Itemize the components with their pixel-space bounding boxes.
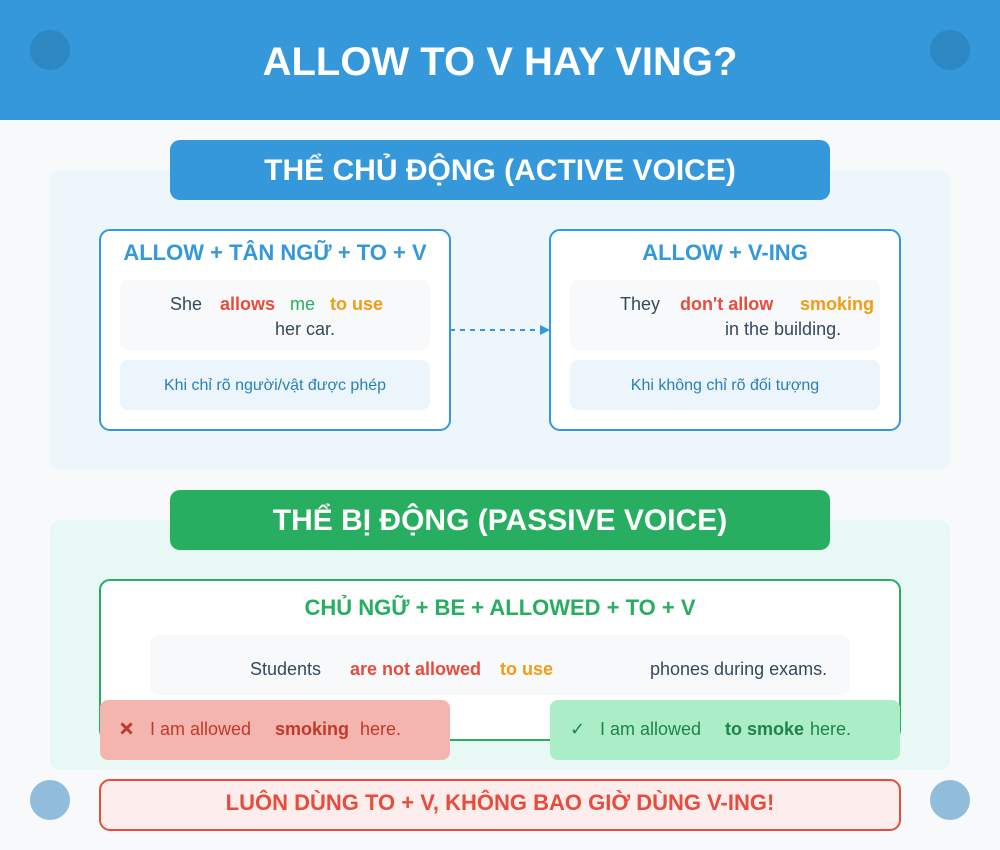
callout: incorrect example: here. xyxy=(360,719,401,739)
callout: correct example: to smoke xyxy=(725,719,804,739)
example sentence: Students are not allowed to use xyxy=(150,635,850,695)
callout: correct example: here. xyxy=(810,719,851,739)
example sentence: Students are not allowed to use: are not allowed xyxy=(350,659,481,679)
title: ALLOW TO V HAY VING? xyxy=(263,40,737,84)
usage note: object specified xyxy=(120,360,430,410)
callout: correct example xyxy=(550,700,900,760)
callout: incorrect example xyxy=(100,700,450,760)
heading: active voice xyxy=(170,140,830,200)
panel: active voice xyxy=(50,170,950,470)
example sentence: She allows me to use her car: allows xyxy=(220,294,275,314)
callout: correct example: I am allowed xyxy=(600,719,701,739)
arrow: between cards xyxy=(451,325,549,335)
icon: footer circle right xyxy=(930,780,970,820)
icon: check mark: ✓ xyxy=(570,719,585,740)
card heading: ALLOW + TÂN NGỮ + TO + V xyxy=(123,240,427,265)
usage note: object unspecified: Khi không chỉ rõ đối tượng xyxy=(631,377,819,394)
example sentence: She allows me to use her car: her car. xyxy=(275,319,335,339)
card: allow + object + to V xyxy=(99,229,451,431)
usage note: object unspecified xyxy=(570,360,880,410)
example sentence: Students are not allowed to use: phones during exams. xyxy=(650,659,827,679)
heading: passive voice: THỂ BỊ ĐỘNG (PASSIVE VOICE) xyxy=(273,504,727,537)
example sentence: They don't allow smoking: in the building. xyxy=(725,319,841,339)
icon: header circle right xyxy=(930,30,970,70)
callout: incorrect example: smoking xyxy=(275,719,349,739)
example sentence: They don't allow smoking: They xyxy=(620,294,660,314)
panel: passive voice xyxy=(50,520,950,770)
card: passive formula xyxy=(99,579,901,741)
usage note: object specified: Khi chỉ rõ người/vật được phép xyxy=(164,377,386,394)
card heading: CHỦ NGỮ + BE + ALLOWED + TO + V xyxy=(304,595,696,620)
icon: footer circle left xyxy=(30,780,70,820)
header banner xyxy=(0,0,1000,120)
example sentence: They don't allow smoking: don't allow xyxy=(680,294,773,314)
example sentence: She allows me to use her car: She xyxy=(170,294,202,314)
card: allow + V-ing xyxy=(549,229,901,431)
heading: passive voice xyxy=(170,490,830,550)
warning banner xyxy=(99,779,901,831)
example sentence: They don't allow smoking: smoking xyxy=(800,294,874,314)
example sentence: Students are not allowed to use: Students xyxy=(250,659,321,679)
warning banner: LUÔN DÙNG TO + V, KHÔNG BAO GIỜ DÙNG V-ING! xyxy=(226,790,774,815)
example sentence: She allows me to use her car xyxy=(120,280,430,350)
icon: header circle left xyxy=(30,30,70,70)
example sentence: Students are not allowed to use: to use xyxy=(500,659,553,679)
example sentence: They don't allow smoking xyxy=(570,280,880,350)
icon: cross: ✕ xyxy=(119,719,134,740)
heading: active voice: THỂ CHỦ ĐỘNG (ACTIVE VOICE) xyxy=(264,154,736,187)
card heading: ALLOW + V-ING xyxy=(642,240,808,265)
example sentence: She allows me to use her car: to use xyxy=(330,294,383,314)
callout: incorrect example: I am allowed xyxy=(150,719,251,739)
example sentence: She allows me to use her car: me xyxy=(290,294,315,314)
